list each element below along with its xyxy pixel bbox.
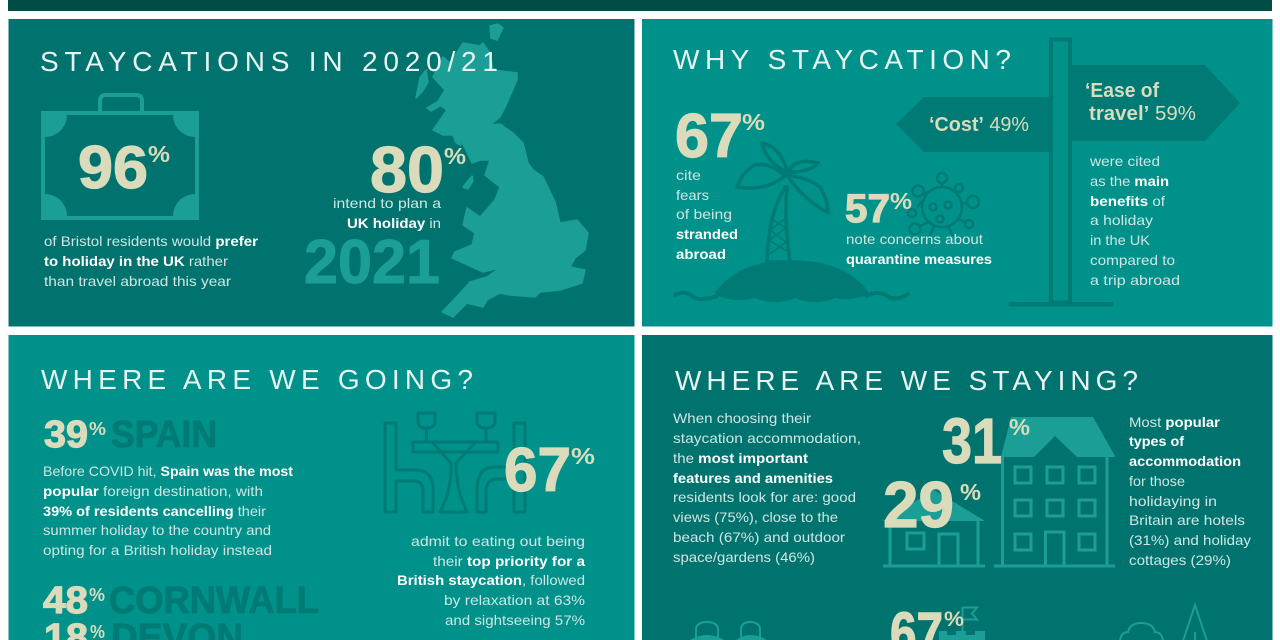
signpost pole [1008,40,1114,306]
text: Spain paragraph: Before COVID hit, Spain was the most [43,463,293,479]
text: main benefits [1089,153,1180,288]
stat: 48% Cornwall: CORNWALL [109,580,319,622]
heading: WHERE ARE WE STAYING? [675,365,1138,396]
stat: 48% Cornwall: 48 [43,580,88,622]
label: ease of travel [1085,80,1196,125]
year 2021: 2021 [304,228,440,297]
stat: 31% hotels: 31 [942,405,1002,477]
stat: 67% stranded: % [742,109,765,135]
text: features and amenities: space/gardens (46%) [673,549,815,565]
icon: suitcase [41,95,199,220]
text: accommodation types: cottages (29%) [1129,552,1231,568]
stat: 80%: % [444,143,466,169]
text: intend to plan a UK holiday [333,195,441,231]
icon: hotel [994,417,1116,566]
stat: 57% quarantine: % [890,188,912,214]
stat: 96%: 96 [78,134,148,201]
text: quarantine measures: quarantine measures [846,251,992,267]
icon: palm tree island [675,143,908,300]
text: eating out priority [397,533,585,628]
text: features and amenities: the most important [673,450,808,466]
text: main benefits: a trip abroad [1090,272,1180,288]
stat: 67% stranded: 67 [675,102,743,171]
panel: where are we going [8,335,634,640]
text: features and amenities: residents look for are: good [673,489,856,505]
text: Spain paragraph: opting for a British holiday instead [43,542,272,558]
stat: 57% quarantine [845,187,912,231]
text: intend to plan a UK holiday: UK holiday in [347,215,441,231]
text: fears of being stranded: of being [676,206,732,222]
text: accommodation types: for those [1129,473,1185,489]
text: intend to plan a UK holiday: intend to plan a [333,195,441,211]
stat: 39% Spain: 39 [44,414,88,456]
stat: 96%: % [148,141,170,167]
text: fears of being stranded: stranded [676,226,738,242]
stat: 67% eating out: % [571,443,595,469]
text: features and amenities: When choosing their [673,410,811,426]
text: accommodation types: (31%) and holiday [1129,532,1251,548]
text: main benefits: a holiday [1090,212,1153,228]
heading: WHY STAYCATION? [673,44,1011,75]
panel: staycations in 2020/21 [8,19,634,326]
text: accommodation types: holidaying in [1129,493,1217,509]
stat: 39% Spain [44,414,217,456]
text: features and amenities: staycation accommodation, [673,430,861,446]
text: prefer UK holiday: of Bristol residents would prefer [44,233,259,249]
text: prefer UK holiday: than travel abroad this year [44,273,231,289]
text: main benefits: in the UK [1090,232,1151,248]
stat: 39% Spain: SPAIN [111,414,217,456]
text: main benefits: compared to [1090,252,1175,268]
stat: 18% Devon [44,617,243,640]
icon: sandcastle and flag [939,607,985,640]
text: eating out priority: and sightseeing 57% [445,612,585,628]
icon: trees [1120,605,1207,640]
text: accommodation types: types of [1129,433,1184,449]
text: Spain paragraph: summer holiday to the country and [43,522,271,538]
text: main benefits: benefits of [1090,193,1165,209]
text: accommodation types: accommodation [1129,453,1241,469]
text: eating out priority: their top priority for a [433,553,585,569]
text: eating out priority: admit to eating out being [411,533,585,549]
text: eating out priority: by relaxation at 63% [444,592,585,608]
icon: cottage [883,490,985,566]
text: features and amenities [673,410,861,565]
stat: 29% cottages: % [960,479,981,505]
stat: 67% eating out: 67 [504,436,571,505]
label: ease of travel: travel’ 59% [1089,103,1196,125]
text: accommodation types: Most popular [1129,414,1221,430]
stat: 31% hotels: % [1009,414,1030,440]
label: ease of travel: ‘Ease of [1085,80,1159,102]
text: Spain paragraph [43,463,293,558]
stat: 57% quarantine: 57 [845,187,890,231]
text: main benefits: as the main [1090,173,1169,189]
text: Spain paragraph: popular foreign destination, with [43,483,263,499]
text: eating out priority: British staycation , followed [397,572,585,588]
stat: 48% Cornwall: % [89,585,105,605]
panel: where are we staying [642,335,1272,640]
stat: 67% beach: % [944,608,964,631]
text: fears of being stranded [676,167,738,262]
text: prefer UK holiday: to holiday in the UK rather [44,253,228,269]
heading: STAYCATIONS IN 2020/21 [40,46,498,77]
text: fears of being stranded: fears [676,187,709,203]
text: accommodation types [1129,414,1251,568]
text: fears of being stranded: abroad [676,246,726,262]
icon: virus [908,173,979,236]
label: cost: ‘Cost’ 49% [929,114,1029,136]
text: features and amenities: features and amenities [673,470,833,486]
panel: why staycation [642,19,1272,326]
text: prefer UK holiday [44,233,259,289]
text: fears of being stranded: cite [676,167,701,183]
stat: 29% cottages: 29 [883,468,954,541]
text: quarantine measures: note concerns about [846,231,983,247]
stat: 39% Spain: % [89,419,106,439]
icon: buckets [690,622,767,640]
text: features and amenities: views (75%), close to the [673,509,838,525]
heading: WHERE ARE WE GOING? [41,364,473,395]
text: Spain paragraph: 39% of residents cancelling their [43,503,266,519]
text: features and amenities: beach (67%) and outdoor [673,529,845,545]
icon: dining table and chairs [385,413,525,512]
top banner strip [8,0,1272,11]
text: main benefits: were cited [1089,153,1160,169]
map of Great Britain [416,24,588,317]
signpost arrows [896,65,1240,152]
text: accommodation types: Britain are hotels [1129,512,1245,528]
text: quarantine measures [846,231,992,267]
stat: 80%: 80 [370,133,444,206]
